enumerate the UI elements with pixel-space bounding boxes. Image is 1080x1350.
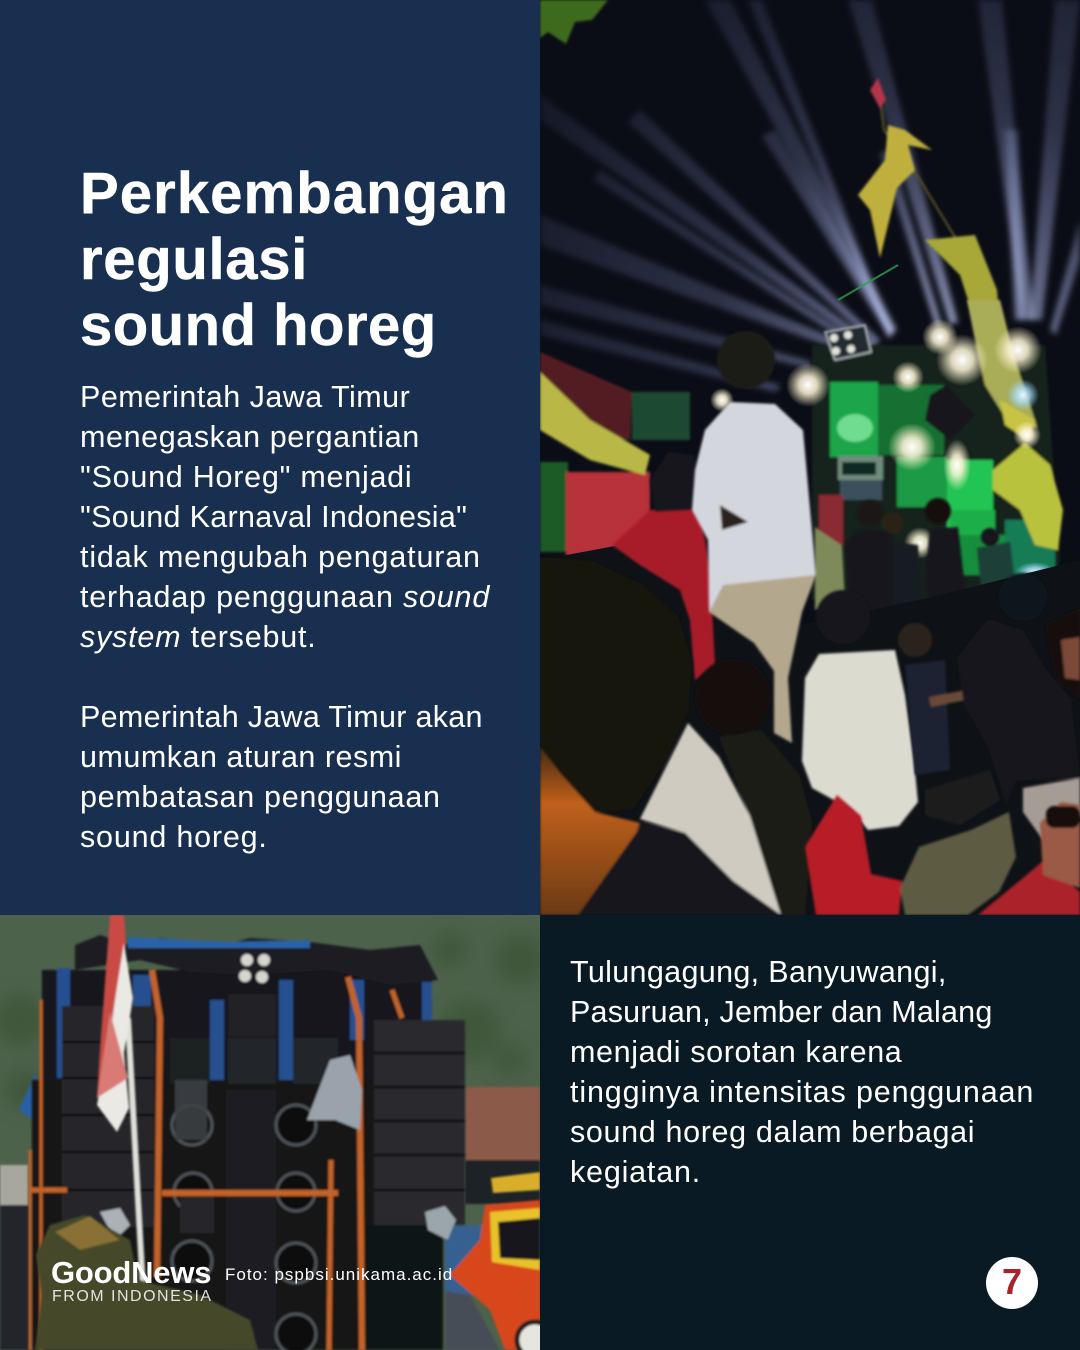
icon: green laser [838,265,898,300]
text block: regions: tingginya intensitas penggunaan [570,1075,1034,1109]
text block: first paragraph: tidak mengubah pengaturan [80,540,481,574]
text block: first paragraph: system tersebut. [80,620,317,654]
page number badge: 7 [1002,1261,1022,1302]
text block: regions [570,955,1034,1189]
text block: first paragraph: Pemerintah Jawa Timur [80,380,410,414]
light beams [540,0,1080,392]
red truck and car [445,1172,553,1350]
text block: regions: Pasuruan, Jember dan Malang [570,995,992,1029]
logo: GoodNews from Indonesia [51,1255,213,1305]
canopy [75,935,438,985]
left speakers [62,1006,154,1227]
decorative pole with leaves [858,78,1000,330]
people on stage [815,498,1016,650]
page number badge [986,1257,1038,1309]
crowd base [540,545,1080,915]
stage [812,300,1063,600]
standing man [692,331,816,743]
plastic covers [307,1055,362,1130]
bags and clothes [805,795,1080,915]
text block: first paragraph: terhadap penggunaan sound [80,580,490,614]
text block: regions: sound horeg dalam berbagai [570,1115,975,1149]
right side crowd [898,573,1080,840]
bottom right speakers [365,1225,443,1350]
text block: first paragraph [80,380,490,654]
red dress person [612,452,715,680]
text block: second paragraph: pembatasan penggunaan [80,780,441,814]
right speakers [374,1020,465,1225]
panel: regions text [540,915,1080,1350]
foliage top [540,0,608,44]
title: regulasi [80,227,308,292]
lights [239,954,270,983]
title: sound horeg [80,293,437,358]
text block: second paragraph: umumkan aturan resmi [80,740,402,774]
logo: GoodNews from Indonesia: GoodNews [51,1255,211,1290]
orange straps [29,970,402,1350]
text block: second paragraph: Pemerintah Jawa Timur akan [80,700,483,734]
seated person in white [802,590,918,830]
photo: night crowd watching the sound system stage [540,0,1080,915]
woofers [172,1105,316,1350]
logo: GoodNews from Indonesia: FROM INDONESIA [52,1288,213,1305]
foreground plant [35,1215,258,1350]
text block: regions: menjadi sorotan karena [570,1035,902,1069]
text block: second paragraph: sound horeg. [80,820,268,854]
hillside [0,915,546,1350]
left banners [540,352,690,556]
house roof and buildings [0,1072,540,1350]
text block: second paragraph [80,700,483,854]
text block: first paragraph: menegaskan pergantian [80,420,420,454]
speaker tower [29,935,465,1350]
stage lights [710,319,1055,582]
foreground head [540,557,812,915]
text block: regions: kegiatan. [570,1155,701,1189]
flag [97,915,143,1290]
photo credit: Foto: pspbsi.unikama.ac.id [225,1265,453,1284]
panel: title and intro text [0,0,540,915]
title: Perkembangan [80,161,509,226]
photo: stacked speakers on a truck [0,915,540,1350]
text block: regions: Tulungagung, Banyuwangi, [570,955,947,989]
title [80,161,509,358]
text block: first paragraph: "Sound Karnaval Indonesia" [80,500,467,534]
text block: first paragraph: "Sound Horeg" menjadi [80,460,412,494]
